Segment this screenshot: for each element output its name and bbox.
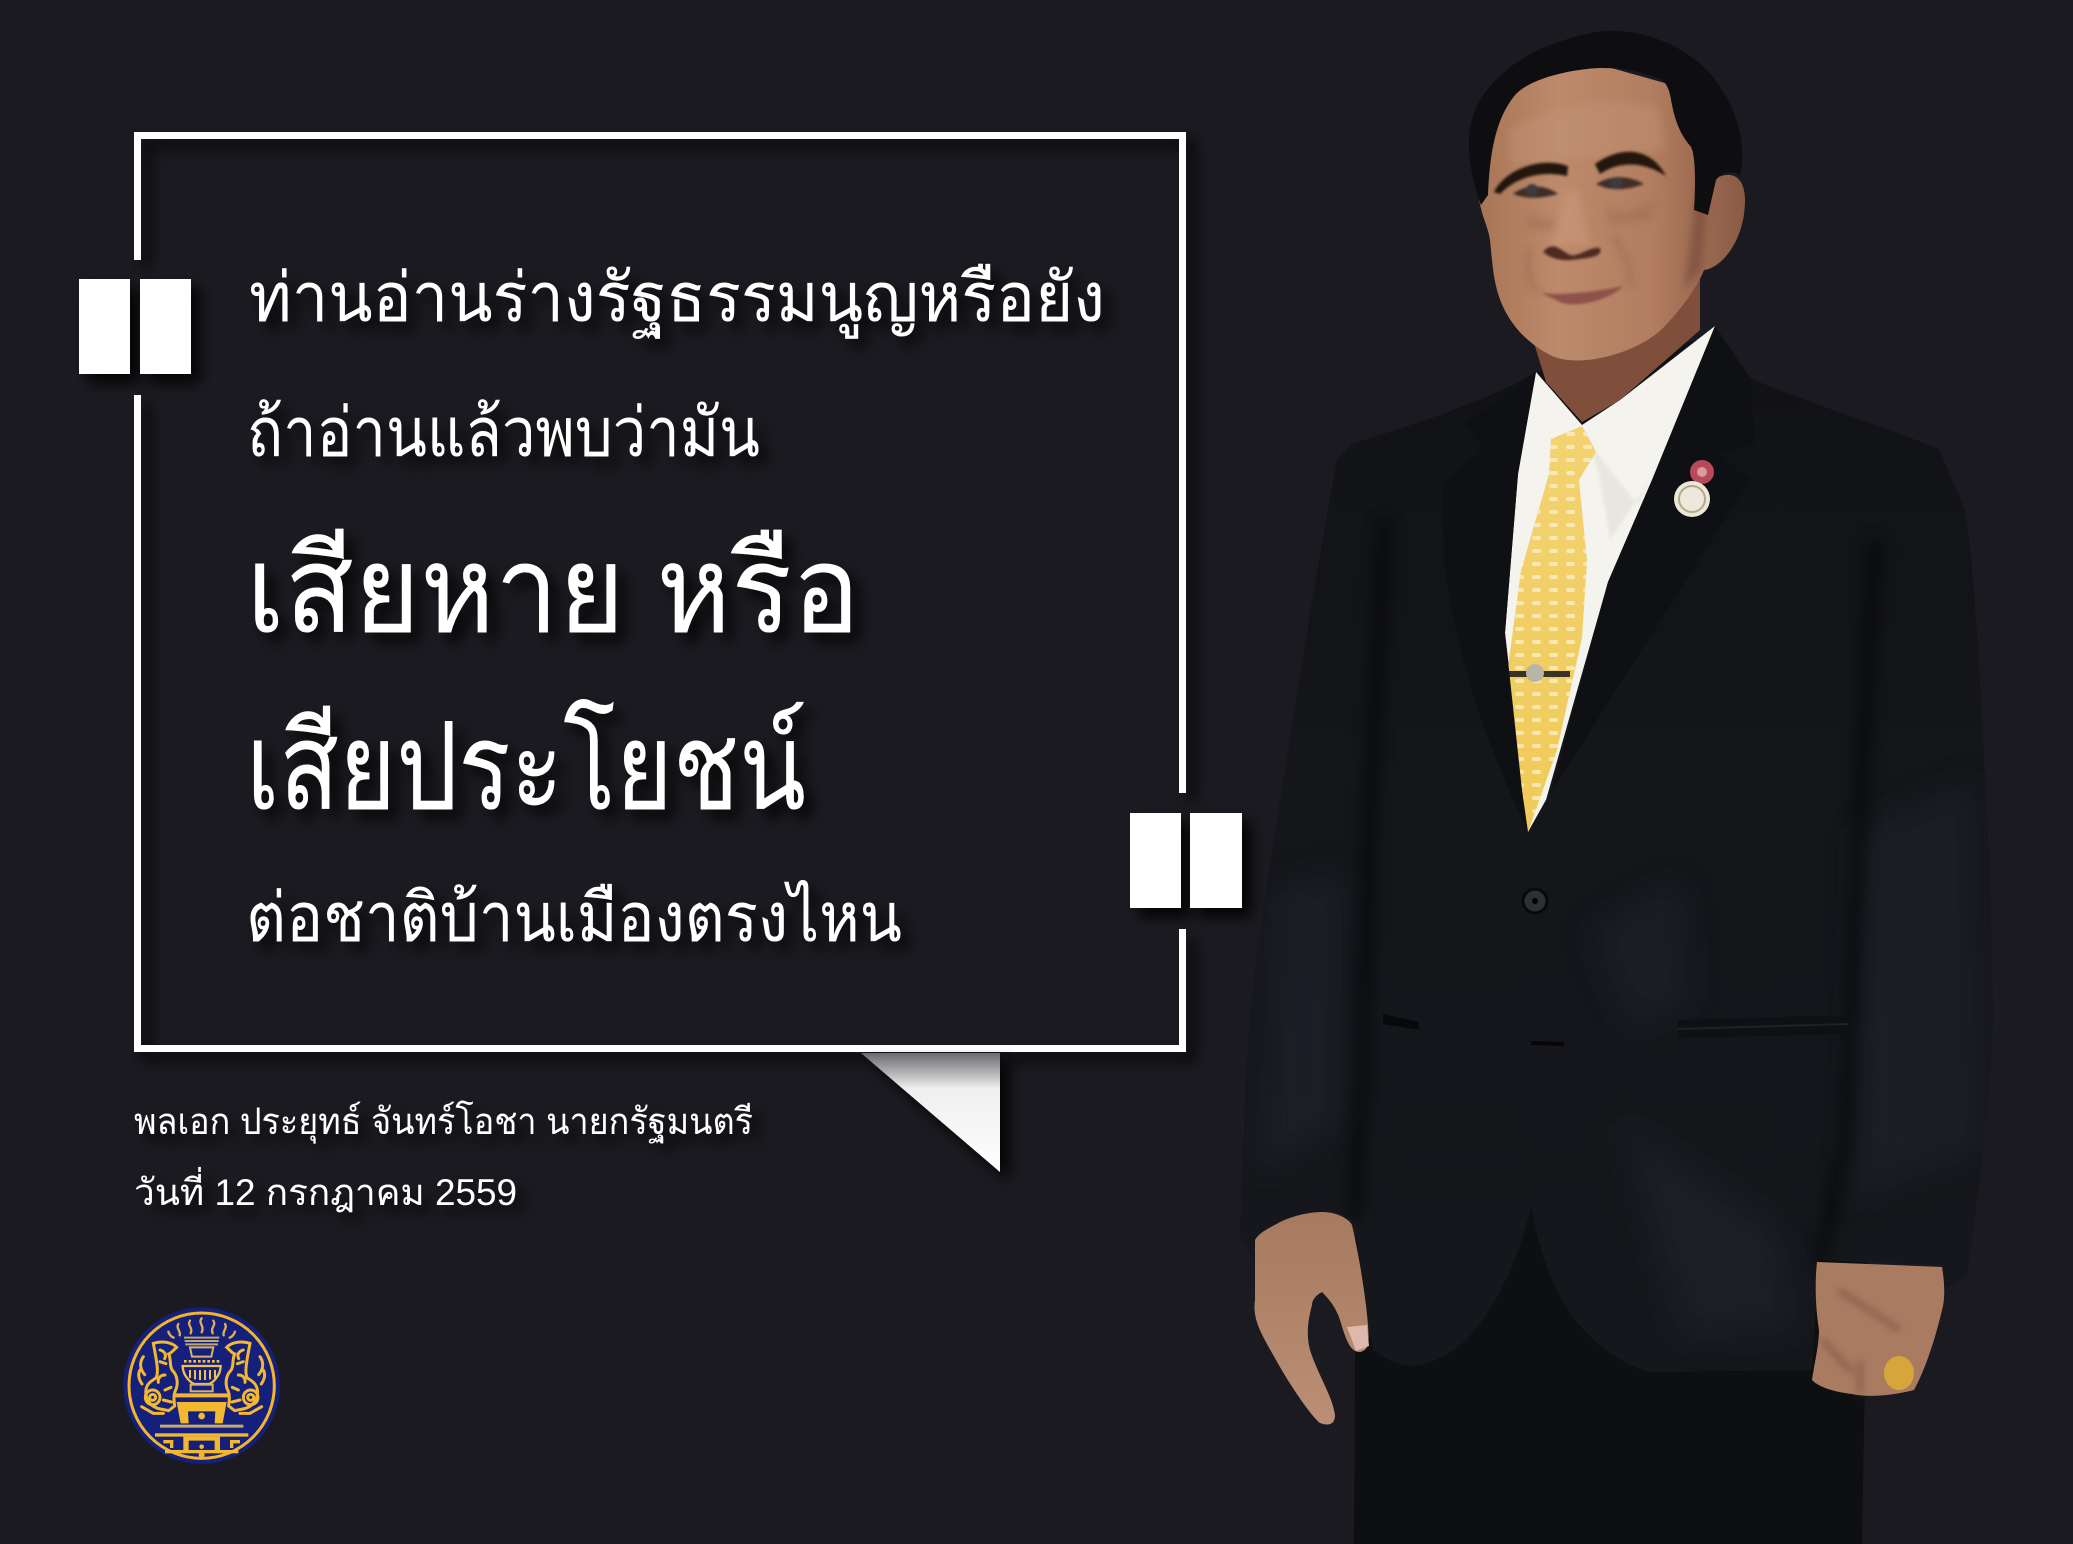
gold ring: [1884, 1356, 1914, 1390]
eyebrows: [1494, 152, 1666, 194]
quote text: [246, 260, 1105, 956]
speaker name and title: พลเอก ประยุทธ์ จันทร์โอชา นายกรัฐมนตรี: [134, 1100, 753, 1144]
suit jacket: [1240, 337, 1993, 1372]
seal pedestal: [155, 1393, 248, 1458]
necktie: [1505, 426, 1596, 832]
eyes: [1513, 177, 1644, 198]
sleeve seam shading: [1355, 520, 1875, 1260]
date: วันที่ 12 กรกฎาคม 2559: [134, 1166, 517, 1213]
tie clip: [1506, 664, 1570, 682]
quote line 2: ถ้าอ่านแล้วพบว่ามัน: [247, 395, 760, 471]
quote line 5: ต่อชาติบ้านเมืองตรงไหน: [246, 879, 902, 956]
suit button and pockets: [1383, 889, 1848, 1044]
seal lions: [139, 1342, 265, 1413]
face shading: [1510, 102, 1708, 292]
left lapel: [1442, 372, 1536, 832]
shirt: [1505, 326, 1715, 832]
speech bubble tail: [861, 1053, 1000, 1172]
seal flames: [168, 1318, 235, 1338]
seal urn: [183, 1338, 221, 1391]
opening quotation mark: [79, 279, 191, 374]
finger creases: [1822, 1290, 1900, 1394]
right lapel: [1528, 326, 1755, 832]
quote line 3 emphasized: เสียหาย หรือ: [246, 522, 860, 658]
emblem: government seal: [123, 1307, 280, 1464]
collar shading: [1582, 426, 1650, 540]
nose: [1543, 246, 1601, 260]
face: [1478, 62, 1745, 360]
closing quotation mark: [1130, 813, 1242, 908]
right hand: [1812, 1262, 1944, 1396]
speech bubble frame: [134, 132, 1186, 1052]
left thumbnail: [1347, 1325, 1369, 1351]
hair: [1469, 31, 1742, 215]
person: Prime Minister portrait: [1240, 31, 1993, 1544]
neck: [1530, 270, 1700, 422]
left hand: [1254, 1212, 1369, 1424]
quote line 1: ท่านอ่านร่างรัฐธรรมนูญหรือยัง: [249, 260, 1105, 339]
quote line 4 emphasized: เสียประโยชน์: [246, 699, 806, 835]
mouth: [1541, 286, 1623, 304]
trousers: [1354, 1200, 1868, 1544]
lapel pins: [1674, 460, 1714, 517]
suit sheen: [1276, 814, 1960, 1314]
attribution: [134, 1100, 753, 1213]
